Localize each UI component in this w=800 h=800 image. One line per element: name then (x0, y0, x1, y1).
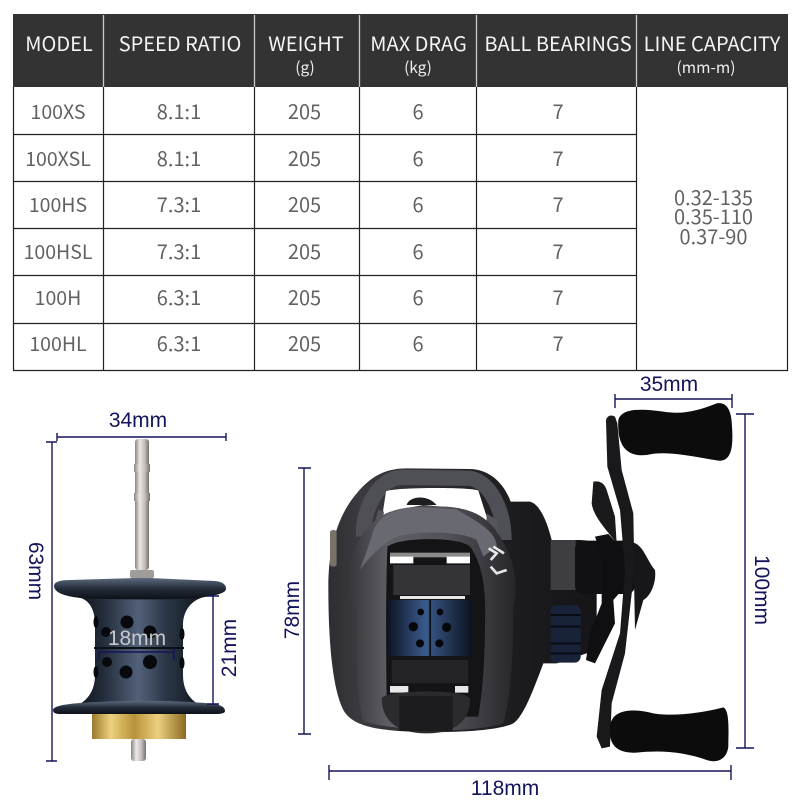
table row: 100XSL: 6 (412, 143, 424, 172)
dimension: 78mm reel body height: 78mm (281, 581, 304, 639)
table header row: (kg) (404, 56, 432, 78)
table row: 100H: 6 (412, 282, 424, 311)
line capacity merged cell: 0.35-110 (674, 201, 753, 230)
table row: 100XS: 7 (552, 96, 564, 125)
table row: 100H (35, 282, 564, 311)
dimension: 34mm spool width: 34mm (109, 409, 167, 432)
dimension: 118mm total width (329, 765, 731, 800)
dimension: 18mm drum width (99, 627, 174, 660)
table row: 100H: 6.3:1 (157, 282, 201, 311)
dimension: 100mm handle span: 100mm (750, 555, 773, 625)
dimension: 63mm spool height: 63mm (24, 542, 47, 600)
reel front frame (346, 506, 516, 730)
spec table (13, 14, 788, 370)
table row: 100HL (29, 328, 564, 357)
table row: 100HS (29, 189, 564, 218)
dimension: 63mm spool height (24, 442, 57, 761)
Daiwa logo mark (489, 547, 507, 573)
table row: 100XSL (25, 143, 564, 172)
table row: 100HSL: 205 (288, 236, 321, 265)
reel thumb bar (382, 691, 470, 733)
table row: 100HSL: 7 (552, 236, 564, 265)
table header row: SPEED RATIO (119, 28, 241, 57)
dimension: 35mm handle knob (615, 373, 732, 408)
dimension: 100mm handle span (736, 414, 773, 748)
dimension: 34mm spool width (57, 409, 226, 441)
table row: 100H: 205 (288, 282, 321, 311)
table header row: (g) (295, 56, 315, 78)
table row: 100XS: 205 (288, 96, 321, 125)
reel side cap knob (330, 530, 337, 567)
line capacity merged cell: 0.32-135 (674, 182, 753, 211)
table row: 100HL: 6 (412, 328, 424, 357)
reel center axle (551, 540, 576, 590)
table row: 100H: 100H (35, 282, 81, 311)
reel top arch (363, 477, 504, 540)
table header row: WEIGHT (268, 28, 344, 57)
table row: 100HS: 6 (412, 189, 424, 218)
reel lower handle knob (610, 707, 729, 761)
table header row: LINE CAPACITY (644, 28, 781, 57)
table row: 100XSL: 100XSL (25, 143, 91, 172)
reel handle arm (597, 416, 634, 748)
dimension: 78mm reel body height (281, 468, 311, 734)
table row: 100HSL: 100HSL (24, 236, 93, 265)
table row: 100HSL (24, 236, 564, 265)
table row: 100HL: 6.3:1 (157, 328, 201, 357)
table row: 100HS: 7 (552, 189, 564, 218)
line capacity merged cell: 0.37-90 (680, 221, 748, 250)
table header row (13, 14, 788, 87)
table grid (13, 87, 788, 370)
table row: 100HL: 205 (288, 328, 321, 357)
table row: 100HL: 100HL (29, 328, 87, 357)
dimension: 21mm drum height (207, 596, 241, 704)
table row: 100HS: 100HS (29, 189, 87, 218)
table row: 100H: 7 (552, 282, 564, 311)
table row: 100HS: 205 (288, 189, 321, 218)
table header row: BALL BEARINGS (484, 28, 632, 57)
dimension: 35mm handle knob: 35mm (640, 373, 698, 396)
table row: 100XS: 6 (412, 96, 424, 125)
table row: 100HS: 7.3:1 (157, 189, 201, 218)
table header row: MAX DRAG (370, 28, 467, 57)
dimension: 118mm total width: 118mm (471, 777, 539, 800)
dimension: 18mm drum width: 18mm (108, 627, 166, 650)
reel star drag (586, 481, 625, 663)
reel upper handle knob (618, 403, 732, 461)
table row: 100HSL: 6 (412, 236, 424, 265)
table header row: MODEL (25, 28, 93, 57)
line capacity merged cell (674, 182, 753, 250)
reel illustration (328, 403, 732, 761)
table row: 100HL: 7 (552, 328, 564, 357)
table header row: (mm-m) (677, 56, 735, 78)
reel blue spool (388, 600, 471, 656)
table row: 100XSL: 8.1:1 (157, 143, 201, 172)
spool illustration (53, 439, 226, 761)
dimension: 21mm drum height: 21mm (218, 619, 241, 677)
table row: 100XS: 100XS (31, 96, 85, 125)
table row: 100HSL: 7.3:1 (157, 236, 201, 265)
table row: 100XSL: 7 (552, 143, 564, 172)
reel side plate and gear housing (328, 468, 597, 732)
table row: 100XS: 8.1:1 (157, 96, 201, 125)
table row: 100XS (31, 96, 564, 125)
reel drag knob (551, 605, 581, 663)
table row: 100XSL: 205 (288, 143, 321, 172)
